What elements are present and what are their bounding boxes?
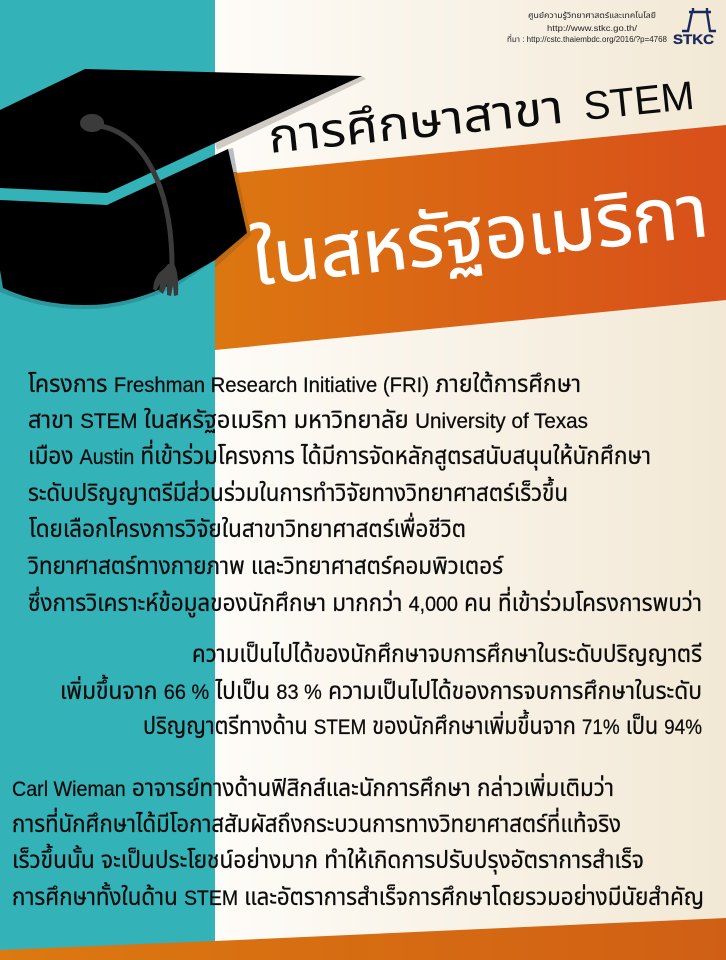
text block: Carl Wieman quote: การศึกษาทั้งในด้าน STEM และอัตราการสำเร็จการศึกษาโดยรวมอย่างมีนัยสำคัญ	[12, 881, 704, 911]
text block: FRI programme description: ซึ่งการวิเคราะห์ข้อมูลของนักศึกษา มากกว่า 4,000 คน ที่เข้าร่วมโครงการพบว่า	[28, 586, 702, 618]
orange footer band	[0, 918, 726, 960]
title: การศึกษาสาขา STEM	[266, 74, 696, 163]
title: ในสหรัฐอเมริกา: ในสหรัฐอเมริกา	[248, 169, 712, 301]
background: teal column	[0, 0, 215, 960]
source credit text: http://www.stkc.go.th/	[547, 24, 638, 33]
text block: graduation statistics: เพิ่มขึ้นจาก 66 % ไปเป็น 83 % ความเป็นไปได้ของการจบการศึกษาในระดับ	[60, 674, 702, 705]
text block: FRI programme description: โดยเลือกโครงการวิจัยในสาขาวิทยาศาสตร์เพื่อชีวิต	[29, 512, 466, 543]
title: การศึกษาสาขา STEM: การศึกษาสาขา	[266, 80, 565, 163]
text block: FRI programme description: สาขา STEM ในสหรัฐอเมริกา มหาวิทยาลัย University of Texas	[28, 407, 588, 434]
text block: FRI programme description: เมือง Austin ที่เข้าร่วมโครงการ ได้มีการจัดหลักสูตรสนับสนุนให้นักศึกษา	[28, 439, 651, 471]
logo: STKC	[673, 8, 716, 47]
source credit text	[507, 10, 668, 44]
text block: graduation statistics: ปริญญาตรีทางด้าน STEM ของนักศึกษาเพิ่มขึ้นจาก 71% เป็น 94%	[143, 709, 702, 740]
title: การศึกษาสาขา STEM: STEM	[581, 74, 696, 129]
icon: graduation cap	[0, 69, 366, 309]
text block: Carl Wieman quote: เร็วขึ้นนั้น จะเป็นประโยชน์อย่างมาก ทำให้เกิดการปรับปรุงอัตราการสำเร็จ	[12, 843, 644, 875]
text block: Carl Wieman quote	[12, 772, 704, 911]
text block: graduation statistics	[60, 641, 702, 740]
logo: STKC: STKC	[673, 31, 714, 47]
source credit text: ที่มา : http://cstc.thaiembdc.org/2016/?p=4768	[507, 33, 668, 44]
text block: Carl Wieman quote: Carl Wieman อาจารย์ทางด้านฟิสิกส์และนักการศึกษา กล่าวเพิ่มเติมว่า	[12, 772, 614, 802]
text block: FRI programme description: ระดับปริญญาตรีมีส่วนร่วมในการทำวิจัยทางวิทยาศาสตร์เร็วขึ้น	[28, 476, 568, 507]
text block: FRI programme description: โครงการ Freshman Research Initiative (FRI) ภายใต้การศึกษา	[28, 371, 581, 398]
text block: graduation statistics: ความเป็นไปได้ของนักศึกษาจบการศึกษาในระดับปริญญาตรี	[192, 641, 702, 668]
text block: FRI programme description	[27, 371, 702, 618]
background: cream panel	[215, 0, 726, 960]
source credit text: ศูนย์ความรู้วิทยาศาสตร์และเทคโนโลยี	[528, 10, 656, 21]
text block: Carl Wieman quote: การที่นักศึกษาได้มีโอกาสสัมผัสถึงกระบวนการทางวิทยาศาสตร์ที่แท้จริง	[12, 807, 621, 838]
orange title band	[215, 125, 726, 350]
text block: FRI programme description: วิทยาศาสตร์ทางกายภาพ และวิทยาศาสตร์คอมพิวเตอร์	[27, 553, 504, 580]
